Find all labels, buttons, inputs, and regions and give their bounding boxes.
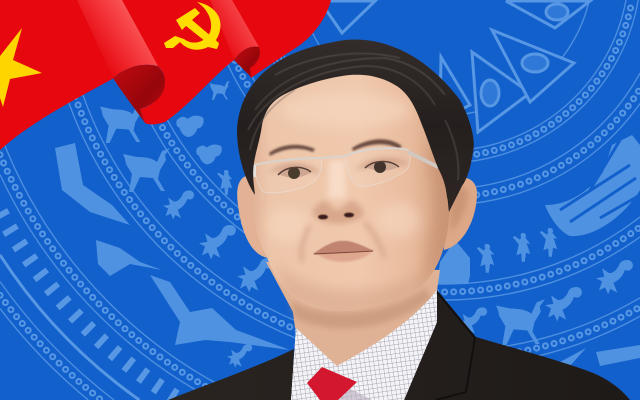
mouth xyxy=(313,241,374,262)
temple xyxy=(408,152,438,167)
right inner fold xyxy=(234,47,260,78)
bird motif lower left xyxy=(96,240,162,276)
icon: yellow star xyxy=(0,28,42,107)
face shading xyxy=(268,94,449,311)
eyes xyxy=(278,161,399,179)
shirt collar xyxy=(291,290,437,400)
eyebrows xyxy=(269,139,402,156)
left inner fold xyxy=(113,65,165,123)
red tie xyxy=(307,367,357,400)
right lapel edge xyxy=(436,292,475,400)
drum birds and animals left xyxy=(55,81,290,367)
inner right ear shadow xyxy=(450,187,468,232)
hinge left xyxy=(252,165,256,177)
hair strands xyxy=(248,53,458,180)
boat motif hatching xyxy=(560,140,640,222)
right ear xyxy=(444,177,477,250)
stork motif lower xyxy=(150,275,290,350)
top rims and bridge xyxy=(254,148,408,165)
house motif xyxy=(437,240,470,284)
upper lip xyxy=(313,241,374,254)
left ear xyxy=(237,175,268,258)
flag: red ribbon with star and hammer and sickle xyxy=(0,0,331,150)
fish motif xyxy=(596,345,640,366)
nasolabial folds xyxy=(301,222,384,262)
lower lip xyxy=(316,251,372,262)
left panel xyxy=(0,0,114,150)
middle panel xyxy=(120,0,259,124)
neck xyxy=(266,262,440,367)
face xyxy=(252,60,450,311)
boat motif xyxy=(545,135,640,236)
right panel xyxy=(228,0,331,78)
icon: hammer and sickle xyxy=(164,2,221,50)
hair xyxy=(237,40,474,212)
right lens xyxy=(345,148,410,186)
man portrait xyxy=(168,40,630,400)
triangle motifs top right xyxy=(320,1,590,132)
nose xyxy=(312,160,364,224)
eye socket shadows xyxy=(268,158,412,174)
drum figures right xyxy=(437,135,640,366)
shirt front xyxy=(318,386,372,400)
nostrils xyxy=(318,215,328,219)
shirt base xyxy=(291,290,437,400)
glasses xyxy=(254,148,438,193)
left lens xyxy=(254,158,322,193)
under-chin shadow xyxy=(290,288,432,329)
suit jacket xyxy=(168,290,630,400)
lip line xyxy=(314,251,373,254)
stork motif upper xyxy=(55,143,130,225)
left highlight band xyxy=(77,0,158,78)
middle highlight band xyxy=(210,0,259,60)
